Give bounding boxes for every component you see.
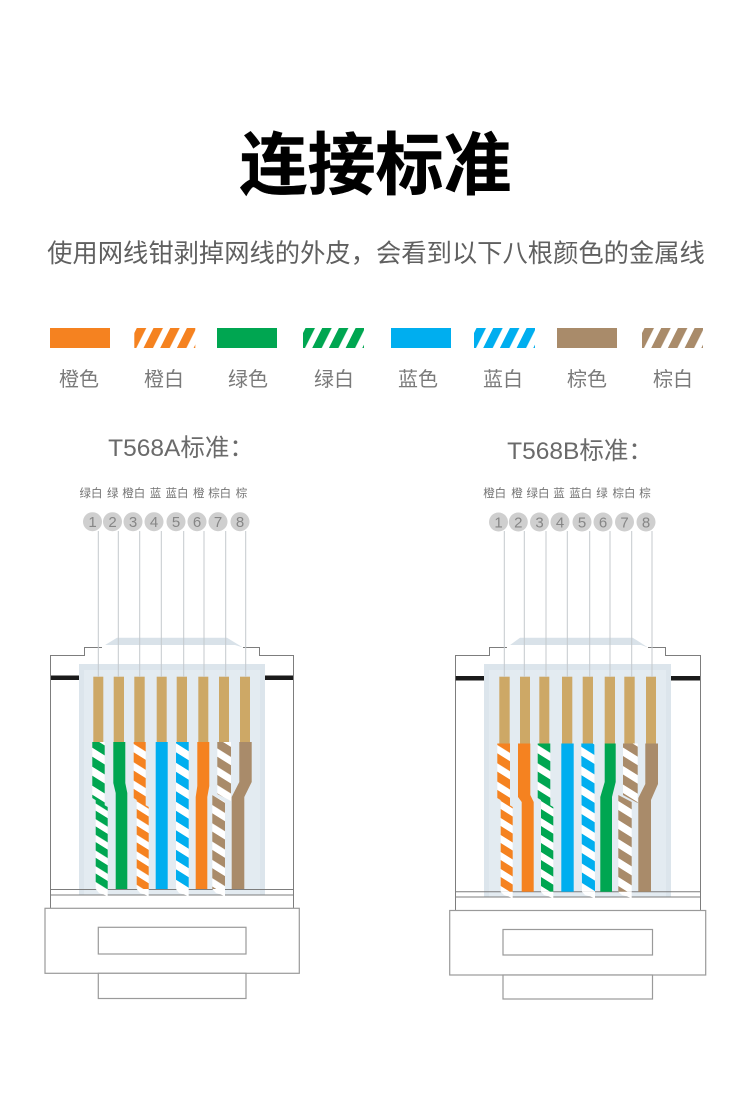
top cap highlight (101, 638, 243, 648)
swatch: orange white (134, 328, 195, 348)
T568A pin numbers: 3 (129, 514, 137, 531)
T568B pin numbers (489, 512, 656, 532)
black contact bars (456, 676, 700, 680)
legend label: green white: 绿白 (314, 368, 354, 391)
plug tab (98, 973, 246, 998)
swatch: blue (391, 328, 451, 348)
colour legend (50, 328, 703, 391)
T568B wire order labels (483, 486, 651, 500)
T568A wire order labels: 蓝白 (166, 486, 188, 500)
T568A wire order labels: 棕 (236, 486, 248, 500)
wire 4 blue (156, 742, 168, 889)
T568B wire order labels: 橙 (511, 486, 523, 500)
legend label: brown white: 棕白 (653, 368, 693, 391)
wire 1 green white (92, 742, 108, 896)
wire 3 green white (538, 744, 553, 898)
plug base (450, 910, 706, 975)
swatch: green (217, 328, 277, 348)
wire 6 green (600, 744, 616, 892)
swatch: brown (557, 328, 617, 348)
inner panel (79, 664, 265, 895)
leader lines (98, 531, 246, 677)
leader lines (504, 531, 652, 677)
T568A wire order labels: 绿白 (80, 486, 102, 500)
connector: T568A (45, 531, 299, 998)
T568B wire order labels: 棕 (639, 486, 651, 500)
T568B wire order labels: 绿白 (526, 486, 550, 500)
legend label: brown: 棕色 (567, 368, 607, 391)
plug tab (503, 975, 652, 999)
swatch: blue white (474, 328, 535, 348)
T568B wire order labels: 橙白 (483, 486, 506, 500)
swatch: green white (303, 328, 364, 348)
T568A wire order labels: 橙白 (122, 486, 145, 500)
T568B wire order labels: 棕白 (612, 486, 636, 500)
connector body outline (50, 648, 294, 908)
wire 4 blue (561, 744, 574, 892)
swatch: brown white (642, 328, 703, 348)
wires (497, 744, 658, 898)
T568A pin numbers (83, 512, 250, 531)
T568B pin numbers: 4 (556, 514, 564, 531)
T568B pin numbers: 1 (494, 514, 503, 531)
wires (92, 742, 252, 896)
T568A wire order labels: 橙 (193, 486, 205, 500)
T568A pin numbers: 5 (172, 514, 180, 531)
plug window (503, 930, 652, 955)
T568B pin numbers: 5 (578, 514, 586, 531)
T568A wire order labels: 蓝 (150, 487, 161, 500)
T568A pin numbers: 8 (236, 514, 244, 531)
legend label: orange: 橙色 (59, 368, 99, 391)
T568A wire order labels: 绿 (107, 486, 119, 500)
wire 7 brown white (618, 744, 638, 898)
T568B pin numbers: 2 (514, 514, 522, 531)
T568B wire order labels: 绿 (596, 486, 608, 500)
connector: T568B (450, 531, 706, 999)
wire 5 blue white (176, 742, 189, 896)
black contact bars (51, 676, 293, 680)
T568A wire order labels: 棕白 (208, 486, 231, 500)
heading: T568A: T568A标准： (108, 434, 254, 462)
subtitle: 使用网线钳剥掉网线的外皮，会看到以下八根颜色的金属线 (47, 240, 705, 268)
T568B wire order labels: 蓝白 (569, 486, 592, 500)
gold contacts (499, 677, 656, 744)
T568B pin numbers: 8 (642, 514, 650, 531)
legend label: blue: 蓝色 (398, 368, 438, 391)
T568A pin numbers: 6 (193, 514, 201, 531)
top cap highlight (507, 638, 648, 648)
legend label: blue white: 蓝白 (483, 368, 523, 391)
legend label: green: 绿色 (228, 368, 268, 391)
wire 1 orange white (497, 744, 513, 898)
wire 6 orange (196, 742, 209, 889)
wire 2 orange (518, 744, 534, 892)
wire 5 blue white (581, 744, 595, 898)
T568A pin numbers: 2 (108, 514, 117, 531)
T568A pin numbers: 4 (150, 514, 158, 531)
T568A pin numbers: 7 (214, 514, 222, 531)
T568A wire order labels (80, 486, 248, 500)
wire 2 green (113, 742, 127, 889)
base lines (456, 892, 700, 897)
connector body outline (456, 648, 700, 910)
plug base (45, 908, 299, 973)
wire 7 brown white (212, 742, 231, 896)
legend label: orange white: 橙白 (144, 368, 184, 391)
base lines (50, 890, 294, 895)
wire 8 brown (232, 742, 252, 889)
T568B pin numbers: 3 (535, 514, 544, 531)
plug window (98, 927, 246, 954)
T568B pin numbers: 6 (599, 514, 607, 531)
title: 连接标准 (239, 128, 512, 204)
inner panel (484, 664, 671, 897)
T568B pin numbers: 7 (620, 514, 629, 531)
T568A pin numbers: 1 (88, 514, 97, 531)
heading: T568B: T568B标准： (507, 437, 653, 465)
T568B wire order labels: 蓝 (553, 487, 565, 500)
wire 8 brown (638, 744, 658, 892)
wire 3 orange white (134, 742, 149, 896)
gold contacts (93, 677, 250, 742)
swatch: orange (50, 328, 110, 348)
